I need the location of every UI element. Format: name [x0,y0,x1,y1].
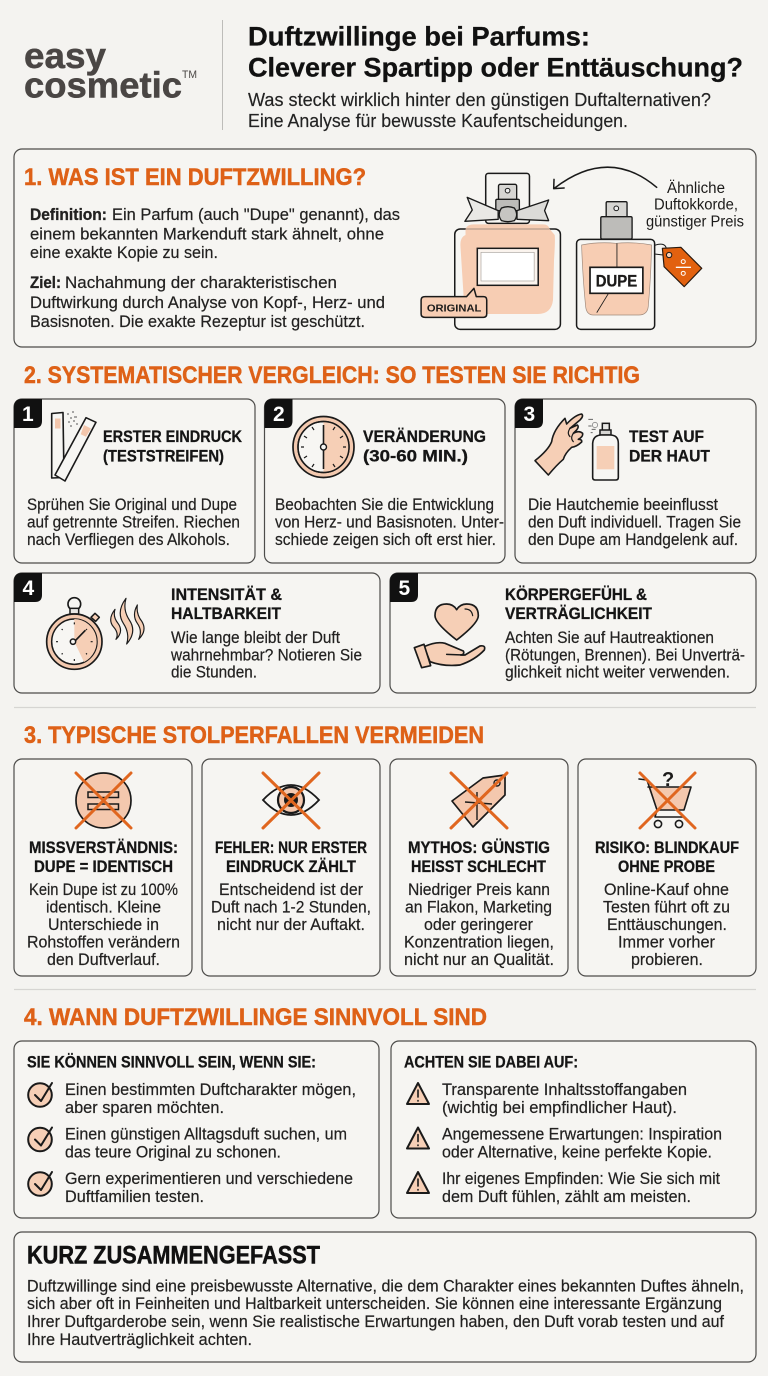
panel: missverständnis [14,759,192,976]
callout: original [421,288,487,317]
card text: Die Hautchemie beeinflusst [528,496,718,514]
subtitle: Eine Analyse für bewusste Kaufentscheidungen. [248,110,628,131]
subtitle [248,89,711,131]
summary text: Duftzwillinge sind eine preisbewusste Alternative, die dem Charakter eines bekannten Duftes ähneln, [27,1278,744,1296]
icon: crossed shopping cart [639,769,695,828]
icon: dupe bottle: DUPE [596,272,637,291]
icon: crossed price tag [451,773,507,828]
panel heading: ACHTEN SIE DABEI AUF: [404,1052,578,1072]
card text: von Herz- und Basisnoten. Unter- [275,514,504,532]
list item 3: Ihr eigenes Empfinden: Wie Sie sich mit [442,1170,720,1188]
card title: DUPE = IDENTISCH [34,857,173,876]
card text: Duft nach 1-2 Stunden, [211,898,371,916]
text block: ziel: Ziel: [30,274,61,292]
card text: die Stunden. [171,664,257,682]
annotation: ähnliche duftakkorde: Duftokkorde, [654,196,738,214]
heading: section 4: 4. WANN DUFTZWILLINGE SINNVOLL SIND [24,1004,487,1031]
summary text: Ihre Hautverträglichkeit achten. [27,1331,252,1349]
badge: 1: 1 [22,403,34,426]
card title: (30-60 MIN.) [363,446,468,466]
card text: nach Verfliegen des Alkohols. [27,531,230,549]
card text: probieren. [631,951,703,969]
text block: ziel: Duftwirkung durch Analyse von Kopf-, Herz- und [30,294,385,312]
card text: Enttäuschungen. [607,916,727,934]
card text: glichkeit nicht weiter verwenden. [505,664,730,682]
card text: Kein Dupe ist zu 100% [29,881,178,899]
list item 2 [407,1126,722,1162]
card title [629,427,711,466]
title: Cleverer Spartipp oder Enttäuschung? [248,52,743,82]
icon: original bottle [455,173,560,329]
card text: den Dupe am Handgelenk auf. [528,531,738,549]
list item 3: Gern experimentieren und verschiedene [65,1170,353,1188]
card title: TEST AUF [629,427,704,446]
icon: price tag [655,244,702,287]
list item 2: Einen günstigen Alltagsduft suchen, um [65,1126,347,1144]
card title: MISSVERSTÄNDNIS: [29,838,178,857]
card text [603,881,730,969]
card title: OHNE PROBE [618,857,715,876]
title [248,22,743,82]
annotation: ähnliche duftakkorde: Ähnliche [667,180,725,197]
panel: step 4 [14,573,380,693]
card text: Entscheidend ist der [219,881,363,899]
card text: an Flakon, Marketing [405,898,552,916]
card text [27,496,240,549]
card text: auf getrennte Streifen. Riechen [27,514,240,532]
panel: step 3 [515,399,756,563]
logo: easy cosmetic: cosmetic [24,64,182,106]
list item 3: Duftfamilien testen. [65,1188,204,1206]
heading: section 2: 2. SYSTEMATISCHER VERGLEICH: SO TESTEN SIE RICHTIG [24,362,640,389]
card text: Online-Kauf ohne [604,881,729,899]
card text: den Duftverlauf. [47,951,160,969]
text block: definition: Definition: [30,206,107,224]
heading: section 1: 1. WAS IST EIN DUFTZWILLING? [24,164,366,191]
card text: nicht nur an Qualität. [404,951,554,969]
arrow: dupe to original [554,167,657,189]
card title: KÖRPERGEFÜHL & [505,585,647,604]
card text: Rohstoffen verändern [27,934,180,952]
illustration: perfume bottles [421,167,702,329]
card text: Unterschiede in [48,916,159,934]
logo: easy cosmetic: easy [24,35,106,76]
list item 1 [28,1081,356,1117]
text block: ziel: Nachahmung der charakteristischen [65,274,337,292]
card text [505,629,745,682]
card text: Wie lange bleibt der Duft [171,629,340,647]
panel: risiko [578,759,756,976]
card title: DER HAUT [629,446,711,466]
card title: VERTRÄGLICHKEIT [505,604,653,623]
list item 1: (wichtig bei empfindlicher Haut). [442,1099,677,1117]
badge: 3 [515,399,543,428]
card text [528,496,741,549]
card text: Testen führt oft zu [603,898,730,916]
card text [170,629,362,682]
card text: oder geringerer [424,916,533,934]
annotation: ähnliche duftakkorde: günstiger Preis [646,214,744,230]
card title: (TESTSTREIFEN) [103,446,224,466]
heading: section 3: 3. TYPISCHE STOLPERFALLEN VERMEIDEN [24,722,484,749]
panel: step 5 [390,573,756,693]
badge: 2 [264,399,292,428]
card text: Konzentration liegen, [404,934,554,952]
panel: mythos [390,759,568,976]
panel: sinnvoll wenn [14,1041,379,1218]
subtitle: Was steckt wirklich hinter den günstigen Duftalternativen? [248,89,711,110]
callout: original: ORIGINAL [427,304,481,315]
icon: hand with spray [535,414,618,480]
list item 1 [407,1081,687,1117]
text block: definition: Ein Parfum (auch "Dupe" genannt), das [112,206,400,224]
panel: achten sie auf [391,1041,756,1218]
card title [171,585,282,623]
card text [404,881,554,969]
list item 1: Einen bestimmten Duftcharakter mögen, [65,1081,356,1099]
panel: step 2 [264,399,505,563]
list item 2: das teure Original zu schonen. [65,1144,281,1162]
panel: kurz zusammengefasst [14,1232,756,1362]
icon: crossed equals [76,773,131,828]
summary text: sich aber oft in Feinheiten und Haltbarkeit unterscheiden. Sie können eine interessante Ergänzung [27,1295,722,1313]
title: Duftzwillinge bei Parfums: [248,22,590,52]
list item 2: Angemessene Erwartungen: Inspiration [442,1126,722,1144]
card text: Beobachten Sie die Entwicklung [275,496,494,514]
card title: MYTHOS: GÜNSTIG [408,838,550,857]
badge: 3: 3 [524,403,535,426]
list item 3: dem Duft fühlen, zählt am meisten. [442,1188,691,1206]
card text: Sprühen Sie Original und Dupe [27,496,237,514]
list item 2 [28,1126,347,1162]
card title [505,585,653,623]
card text: Niedriger Preis kann [408,881,550,899]
card title [215,838,367,876]
list item 2: oder Alternative, keine perfekte Kopie. [442,1144,712,1162]
logo: easy cosmetic: TM [182,69,197,81]
icon: test strips [52,412,96,481]
icon: crossed eye [263,773,319,828]
icon: dupe bottle [577,202,655,329]
icon: heart in hand [414,604,485,668]
card text: Achten Sie auf Hautreaktionen [505,629,714,647]
card text [27,881,180,969]
logo: easy cosmetic [24,35,197,106]
list item 1: Transparente Inhaltsstoffangaben [442,1081,687,1099]
panel heading: SIE KÖNNEN SINNVOLL SEIN, WENN SIE: [27,1052,316,1072]
card title: EINDRUCK ZÄHLT [226,857,357,876]
text block: ziel [30,274,385,331]
summary text: Ihrer Duftgarderobe sein, wenn Sie realistische Erwartungen haben, den Duft vorab testen und auf [27,1313,724,1331]
card title: HEISST SCHLECHT [411,857,547,876]
card title: FEHLER: NUR ERSTER [215,838,367,857]
summary heading: KURZ ZUSAMMENGEFASST [27,1242,320,1270]
card title [408,838,550,876]
card title: ERSTER EINDRUCK [103,427,243,446]
icon: clock [293,416,354,478]
card title: RISIKO: BLINDKAUF [595,838,739,857]
card title: INTENSITÄT & [171,585,282,604]
card text: wahrnehmbar? Notieren Sie [170,646,362,664]
list item 3 [407,1170,720,1206]
text block: ziel: Basisnoten. Die exakte Rezeptur ist geschützt. [30,313,365,331]
text block: definition [30,206,400,262]
card text: nicht nur der Auftakt. [217,916,365,934]
card text [275,496,504,549]
card title [595,838,739,876]
badge: 4: 4 [22,577,34,600]
text block: definition: einem bekannten Markenduft stark ähnelt, ohne [30,226,384,244]
panel: was ist ein duftzwilling [14,149,756,347]
card text: identisch. Kleine [46,898,161,916]
list item 3 [28,1170,353,1206]
card text: (Rötungen, Brennen). Bei Unverträ- [505,646,745,664]
badge: 2: 2 [273,403,285,426]
card text: den Duft individuell. Tragen Sie [528,514,741,532]
panel: step 1 [14,399,255,563]
card title: HALTBARKEIT [171,604,282,623]
text block: definition: eine exakte Kopie zu sein. [30,244,218,262]
badge: 5: 5 [398,577,410,600]
card title: VERÄNDERUNG [363,427,486,446]
card title [29,838,178,876]
card title [363,427,486,466]
summary text [27,1278,744,1349]
icon: crossed shopping cart: ? [662,769,674,791]
badge: 4 [14,573,42,602]
card title [103,427,243,466]
annotation: ähnliche duftakkorde [646,180,744,230]
badge: 1 [14,399,42,428]
list item 1: aber sparen möchten. [65,1099,224,1117]
panel: fehler [202,759,380,976]
icon: stopwatch and scent waves [47,598,144,669]
badge: 5 [390,573,418,602]
card text [211,881,371,934]
card text: schiede zeigen sich oft erst hier. [275,531,496,549]
card text: Immer vorher [618,934,715,952]
